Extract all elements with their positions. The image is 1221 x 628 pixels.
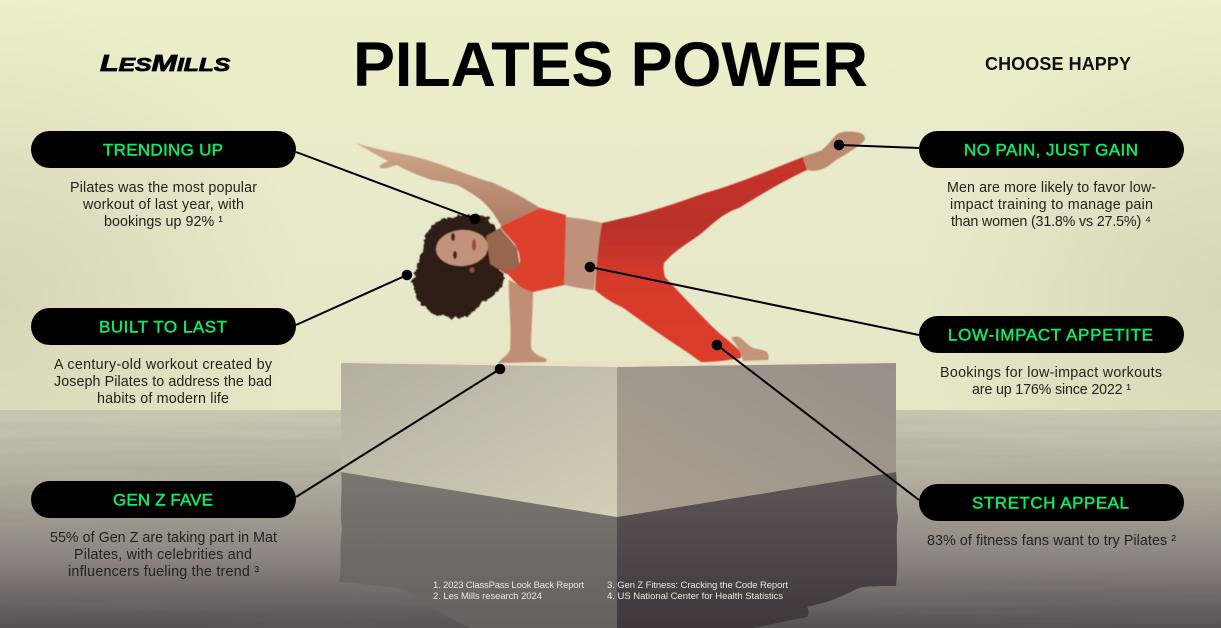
pill heading: GEN Z FAVE [113, 490, 213, 510]
panel: built to last [31, 308, 296, 407]
connector: trending up [296, 152, 480, 224]
pill heading [31, 308, 296, 345]
body text [54, 357, 273, 407]
pill heading: TRENDING UP [103, 140, 223, 160]
footnotes: 3. Gen Z Fitness: Cracking the Code Report [607, 580, 788, 591]
pill heading [919, 316, 1184, 353]
body text: than women (31.8% vs 27.5%) ⁴ [951, 214, 1151, 230]
pill heading: NO PAIN, JUST GAIN [964, 140, 1138, 160]
footnotes: 2. Les Mills research 2024 [433, 591, 542, 602]
pill heading: BUILT TO LAST [99, 318, 227, 336]
background sky [0, 173, 1221, 410]
body text [940, 365, 1162, 398]
panel: low-impact appetite [919, 316, 1184, 398]
connector: gen z fave [296, 364, 505, 497]
pill heading: LOW-IMPACT APPETITE [948, 326, 1153, 344]
pill heading: STRETCH APPEAL [972, 494, 1129, 512]
body text: are up 176% since 2022 ¹ [972, 382, 1131, 398]
pill heading [919, 484, 1184, 521]
neck and chest [486, 228, 520, 274]
panel: gen z fave [31, 481, 296, 580]
lower foot [731, 336, 769, 361]
panel: trending up [31, 131, 296, 230]
body text [947, 180, 1156, 230]
body text: A century-old workout created by [54, 357, 273, 373]
body text [70, 180, 257, 230]
body text: Bookings for low-impact workouts [940, 365, 1162, 381]
pilates figure in red activewear [356, 132, 865, 363]
body text: Men are more likely to favor low- [947, 180, 1156, 196]
pill heading [31, 131, 296, 168]
body text: 83% of fitness fans want to try Pilates ² [927, 533, 1176, 549]
tagline: CHOOSE HAPPY [985, 54, 1131, 74]
body text: Pilates was the most popular [70, 180, 257, 196]
raised arm [356, 143, 540, 227]
connector: low-impact appetite [585, 262, 919, 335]
supporting arm [498, 280, 547, 363]
face [435, 228, 489, 272]
leggings [595, 157, 807, 362]
sports top [500, 208, 566, 292]
title: PILATES POWER [353, 30, 868, 100]
body text: Pilates, with celebrities and [74, 547, 252, 563]
connector: built to last [296, 270, 412, 325]
background water [0, 410, 1221, 628]
body text: impact training to manage pain [950, 197, 1153, 213]
plinth block with reflection [339, 361, 898, 628]
pill heading [31, 481, 296, 518]
body text: Joseph Pilates to address the bad [54, 374, 272, 390]
body text: influencers fueling the trend ³ [68, 564, 259, 580]
body text: 55% of Gen Z are taking part in Mat [50, 530, 277, 546]
panel: stretch appeal [919, 484, 1184, 549]
curly hair [413, 215, 504, 318]
connector: no pain just gain [834, 140, 919, 150]
panel: no pain, just gain [919, 131, 1184, 230]
connector: stretch appeal [712, 340, 919, 500]
footnotes: 1. 2023 ClassPass Look Back Report [433, 580, 584, 591]
body text: habits of modern life [97, 391, 229, 407]
pill heading [919, 131, 1184, 168]
body text [50, 530, 277, 580]
midriff [564, 217, 602, 290]
footnotes: 4. US National Center for Health Statistics [607, 591, 783, 602]
raised foot [803, 132, 865, 171]
logo: Les Mills: LESMILLS [100, 51, 231, 76]
body text: bookings up 92% ¹ [104, 214, 223, 230]
footnotes [433, 580, 788, 602]
body text: workout of last year, with [82, 197, 244, 213]
